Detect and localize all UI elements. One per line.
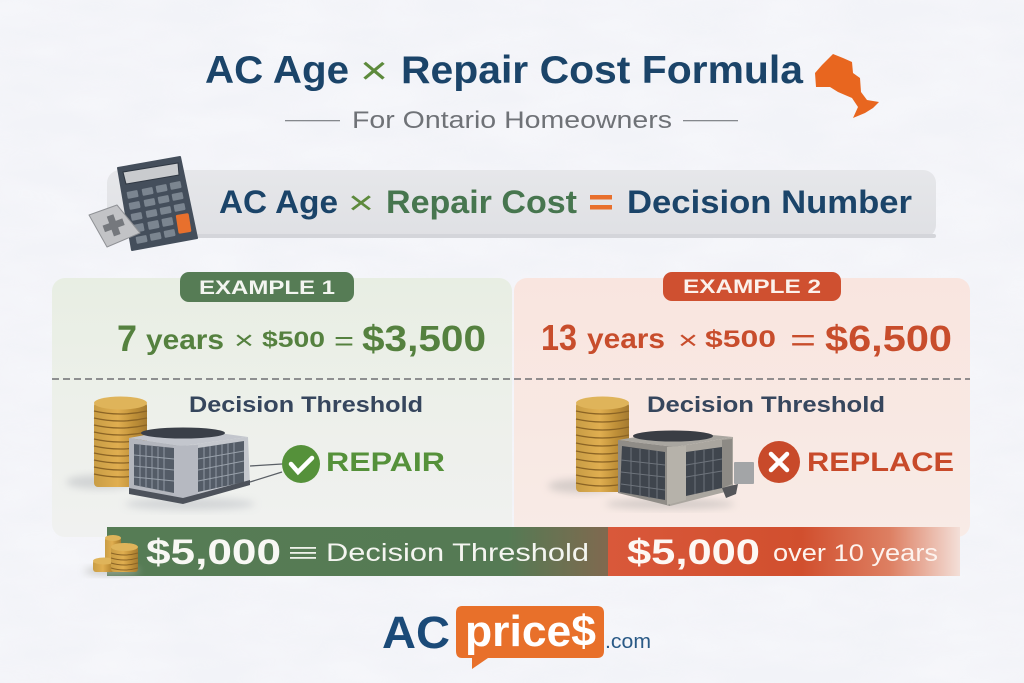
equation: 7 years: 7 <box>117 318 137 359</box>
badge: example 1 <box>180 272 354 302</box>
threshold bar: green: Decision Threshold <box>326 539 589 567</box>
equation: 13 years: 13 <box>541 317 577 358</box>
formula bar: Repair Cost <box>386 184 577 220</box>
threshold bar: green <box>107 527 608 576</box>
title: × <box>360 49 388 93</box>
title: AC Age <box>205 49 349 92</box>
logo: .com <box>605 631 651 653</box>
badge: example 2: EXAMPLE 2 <box>683 277 821 298</box>
threshold bar: green: $5,000 <box>146 533 281 572</box>
equation: 7 years: $3,500 <box>362 318 486 359</box>
formula bar: × <box>348 184 374 221</box>
icon: old AC unit <box>605 430 754 509</box>
badge: example 2 <box>663 272 841 301</box>
equation: 7 years: years <box>146 324 224 355</box>
threshold bar: red <box>608 527 960 576</box>
formula bar <box>107 170 936 238</box>
verdict: repair: REPAIR <box>326 447 445 477</box>
heading: decision threshold: Decision Threshold <box>647 392 885 417</box>
badge: example 1: EXAMPLE 1 <box>199 278 336 299</box>
icon: calculator <box>89 157 197 250</box>
icon: coin stack <box>66 396 147 489</box>
threshold bar: red: over 10 years <box>773 540 938 567</box>
dashed divider <box>52 378 970 380</box>
heading: decision threshold: Decision Threshold <box>189 392 423 417</box>
logo: price$ <box>465 607 596 656</box>
icon: check badge <box>282 445 320 483</box>
icon: small coins <box>84 535 140 575</box>
equation: 13 years: × <box>678 325 698 355</box>
formula bar: AC Age <box>219 184 338 220</box>
verdict: replace: REPLACE <box>807 447 954 477</box>
equation: 13 years: $6,500 <box>825 318 952 359</box>
icon: coin stack <box>548 396 629 493</box>
logo: AC <box>382 607 450 658</box>
icon: Ontario map <box>815 54 879 118</box>
title: Repair Cost Formula <box>401 49 803 92</box>
formula bar: Decision Number <box>627 184 912 220</box>
icon: cross badge <box>758 441 800 483</box>
equation: 7 years: $500 <box>262 327 325 352</box>
equation: 13 years: years <box>587 323 665 354</box>
panel: example 1 <box>52 272 512 537</box>
equation: 7 years <box>117 318 486 359</box>
equation: 7 years: = <box>334 326 354 356</box>
icon: new AC unit <box>125 428 282 510</box>
title <box>205 49 803 93</box>
equation: 13 years <box>541 317 952 359</box>
equation: 13 years: = <box>790 322 816 358</box>
threshold bar: red: $5,000 <box>627 533 760 572</box>
logo <box>382 606 651 669</box>
equation: 13 years: $500 <box>705 326 776 353</box>
panel: example 2 <box>514 272 970 537</box>
subtitle: For Ontario Homeowners <box>352 107 672 134</box>
equation: 7 years: × <box>234 325 254 355</box>
